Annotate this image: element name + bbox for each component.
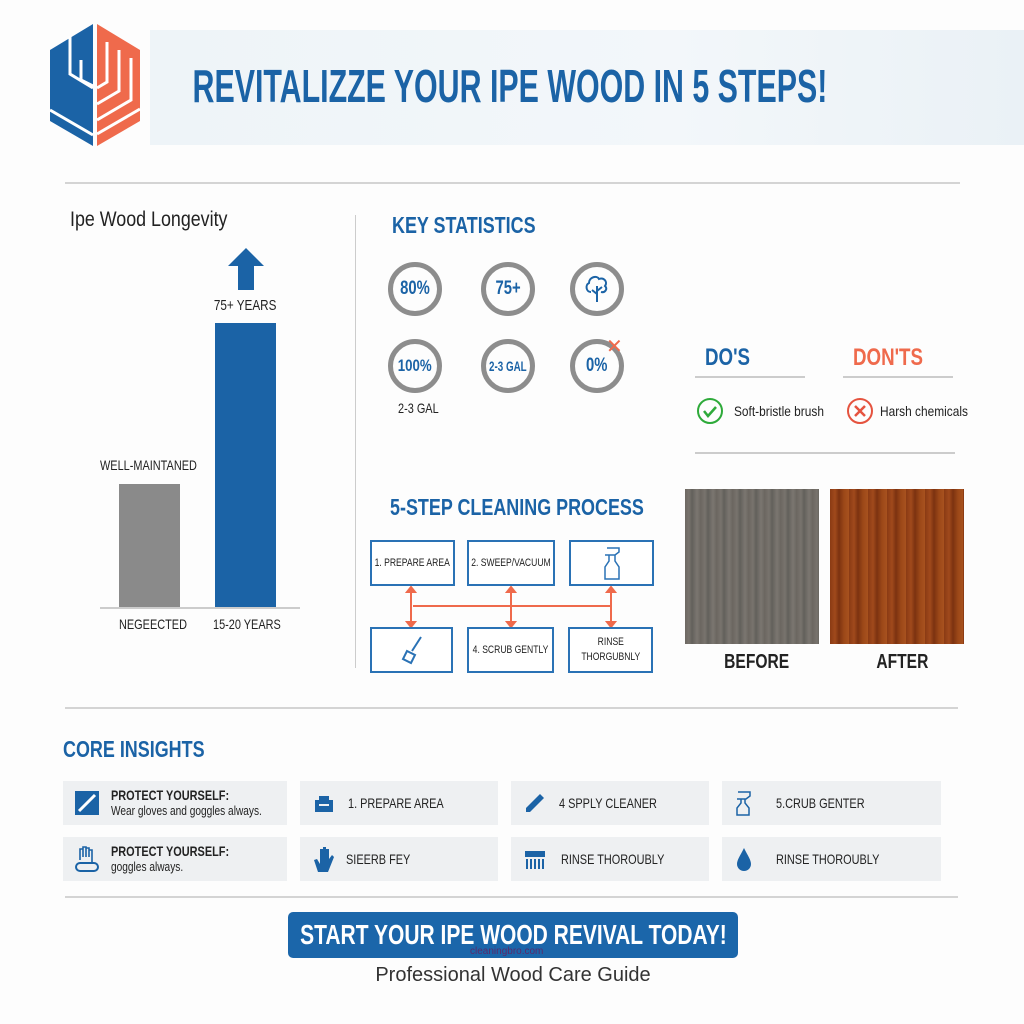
insight cards: RINSE THOROUBLY — [561, 851, 664, 867]
stat circles — [388, 262, 624, 416]
process flow: 1. PREPARE AREA — [375, 557, 450, 569]
insight cards: 4 SPPLY CLEANER — [559, 795, 657, 811]
panel: longevity chart — [70, 208, 300, 632]
insight cards: RINSE THOROUBLY — [776, 851, 879, 867]
process flow: 4. SCRUB GENTLY — [473, 644, 548, 656]
insight cards: PROTECT YOURSELF: — [111, 843, 229, 859]
heading: key statistics: KEY STATISTICS — [392, 212, 536, 238]
stat circles: ✕ — [606, 334, 623, 358]
process flow: RINSE — [597, 636, 624, 648]
bar: well-maintained — [215, 323, 276, 607]
insight cards — [63, 781, 941, 881]
stat circles: 75+ — [495, 278, 521, 299]
panel: do's and don'ts: Harsh chemicals — [880, 403, 968, 419]
label 75+: 75+ YEARS — [214, 297, 276, 314]
insight cards: 5.CRUB GENTER — [776, 795, 865, 811]
heading: 5-step: 5-STEP CLEANING PROCESS — [390, 494, 644, 520]
header band — [150, 30, 1024, 145]
heading: core insights: CORE INSIGHTS — [63, 736, 205, 762]
stat circles: 80% — [400, 278, 430, 299]
logo — [50, 24, 140, 146]
before/after images: BEFORE — [724, 651, 790, 673]
stat circles: 2-3 GAL — [489, 358, 527, 374]
process flow: THORGUBNLY — [581, 651, 640, 663]
stat circles: 0% — [586, 355, 608, 376]
panel: do's and don'ts — [695, 344, 968, 454]
x labels: NEGEECTED — [119, 616, 187, 632]
x labels: 15-20 YEARS — [213, 616, 281, 632]
process flow: 2. SWEEP/VACUUM — [471, 557, 551, 569]
insight cards: SIEERB FEY — [346, 851, 410, 867]
process flow — [370, 540, 654, 673]
before/after images — [685, 489, 964, 673]
CTA button — [288, 912, 738, 958]
CTA button: START YOUR IPE WOOD REVIVAL TODAY! — [300, 919, 726, 950]
x labels — [119, 616, 281, 632]
panel: do's and don'ts: DO'S — [705, 344, 750, 371]
chart title: Ipe Wood Longevity — [70, 208, 227, 231]
stat circles: 100% — [398, 356, 432, 375]
insight cards: Wear gloves and goggles always. — [111, 803, 262, 818]
panel: do's and don'ts: DON'TS — [853, 344, 923, 371]
footer text: Professional Wood Care Guide — [375, 964, 651, 986]
insight cards: goggles always. — [111, 859, 183, 874]
icon: up arrow — [228, 248, 264, 290]
stat circles: 2-3 GAL — [398, 400, 439, 416]
before/after images: AFTER — [876, 651, 928, 673]
bar: neglected — [119, 484, 180, 607]
label: well-maintained: WELL-MAINTANED — [100, 457, 197, 473]
panel: do's and don'ts: Soft-bristle brush — [734, 403, 824, 419]
insight cards: 1. PREPARE AREA — [348, 795, 444, 811]
watermark: cleaningbro.com — [470, 946, 543, 957]
insight cards: PROTECT YOURSELF: — [111, 787, 229, 803]
title: REVITALIZZE YOUR IPE WOOD IN 5 STEPS! — [193, 60, 827, 112]
